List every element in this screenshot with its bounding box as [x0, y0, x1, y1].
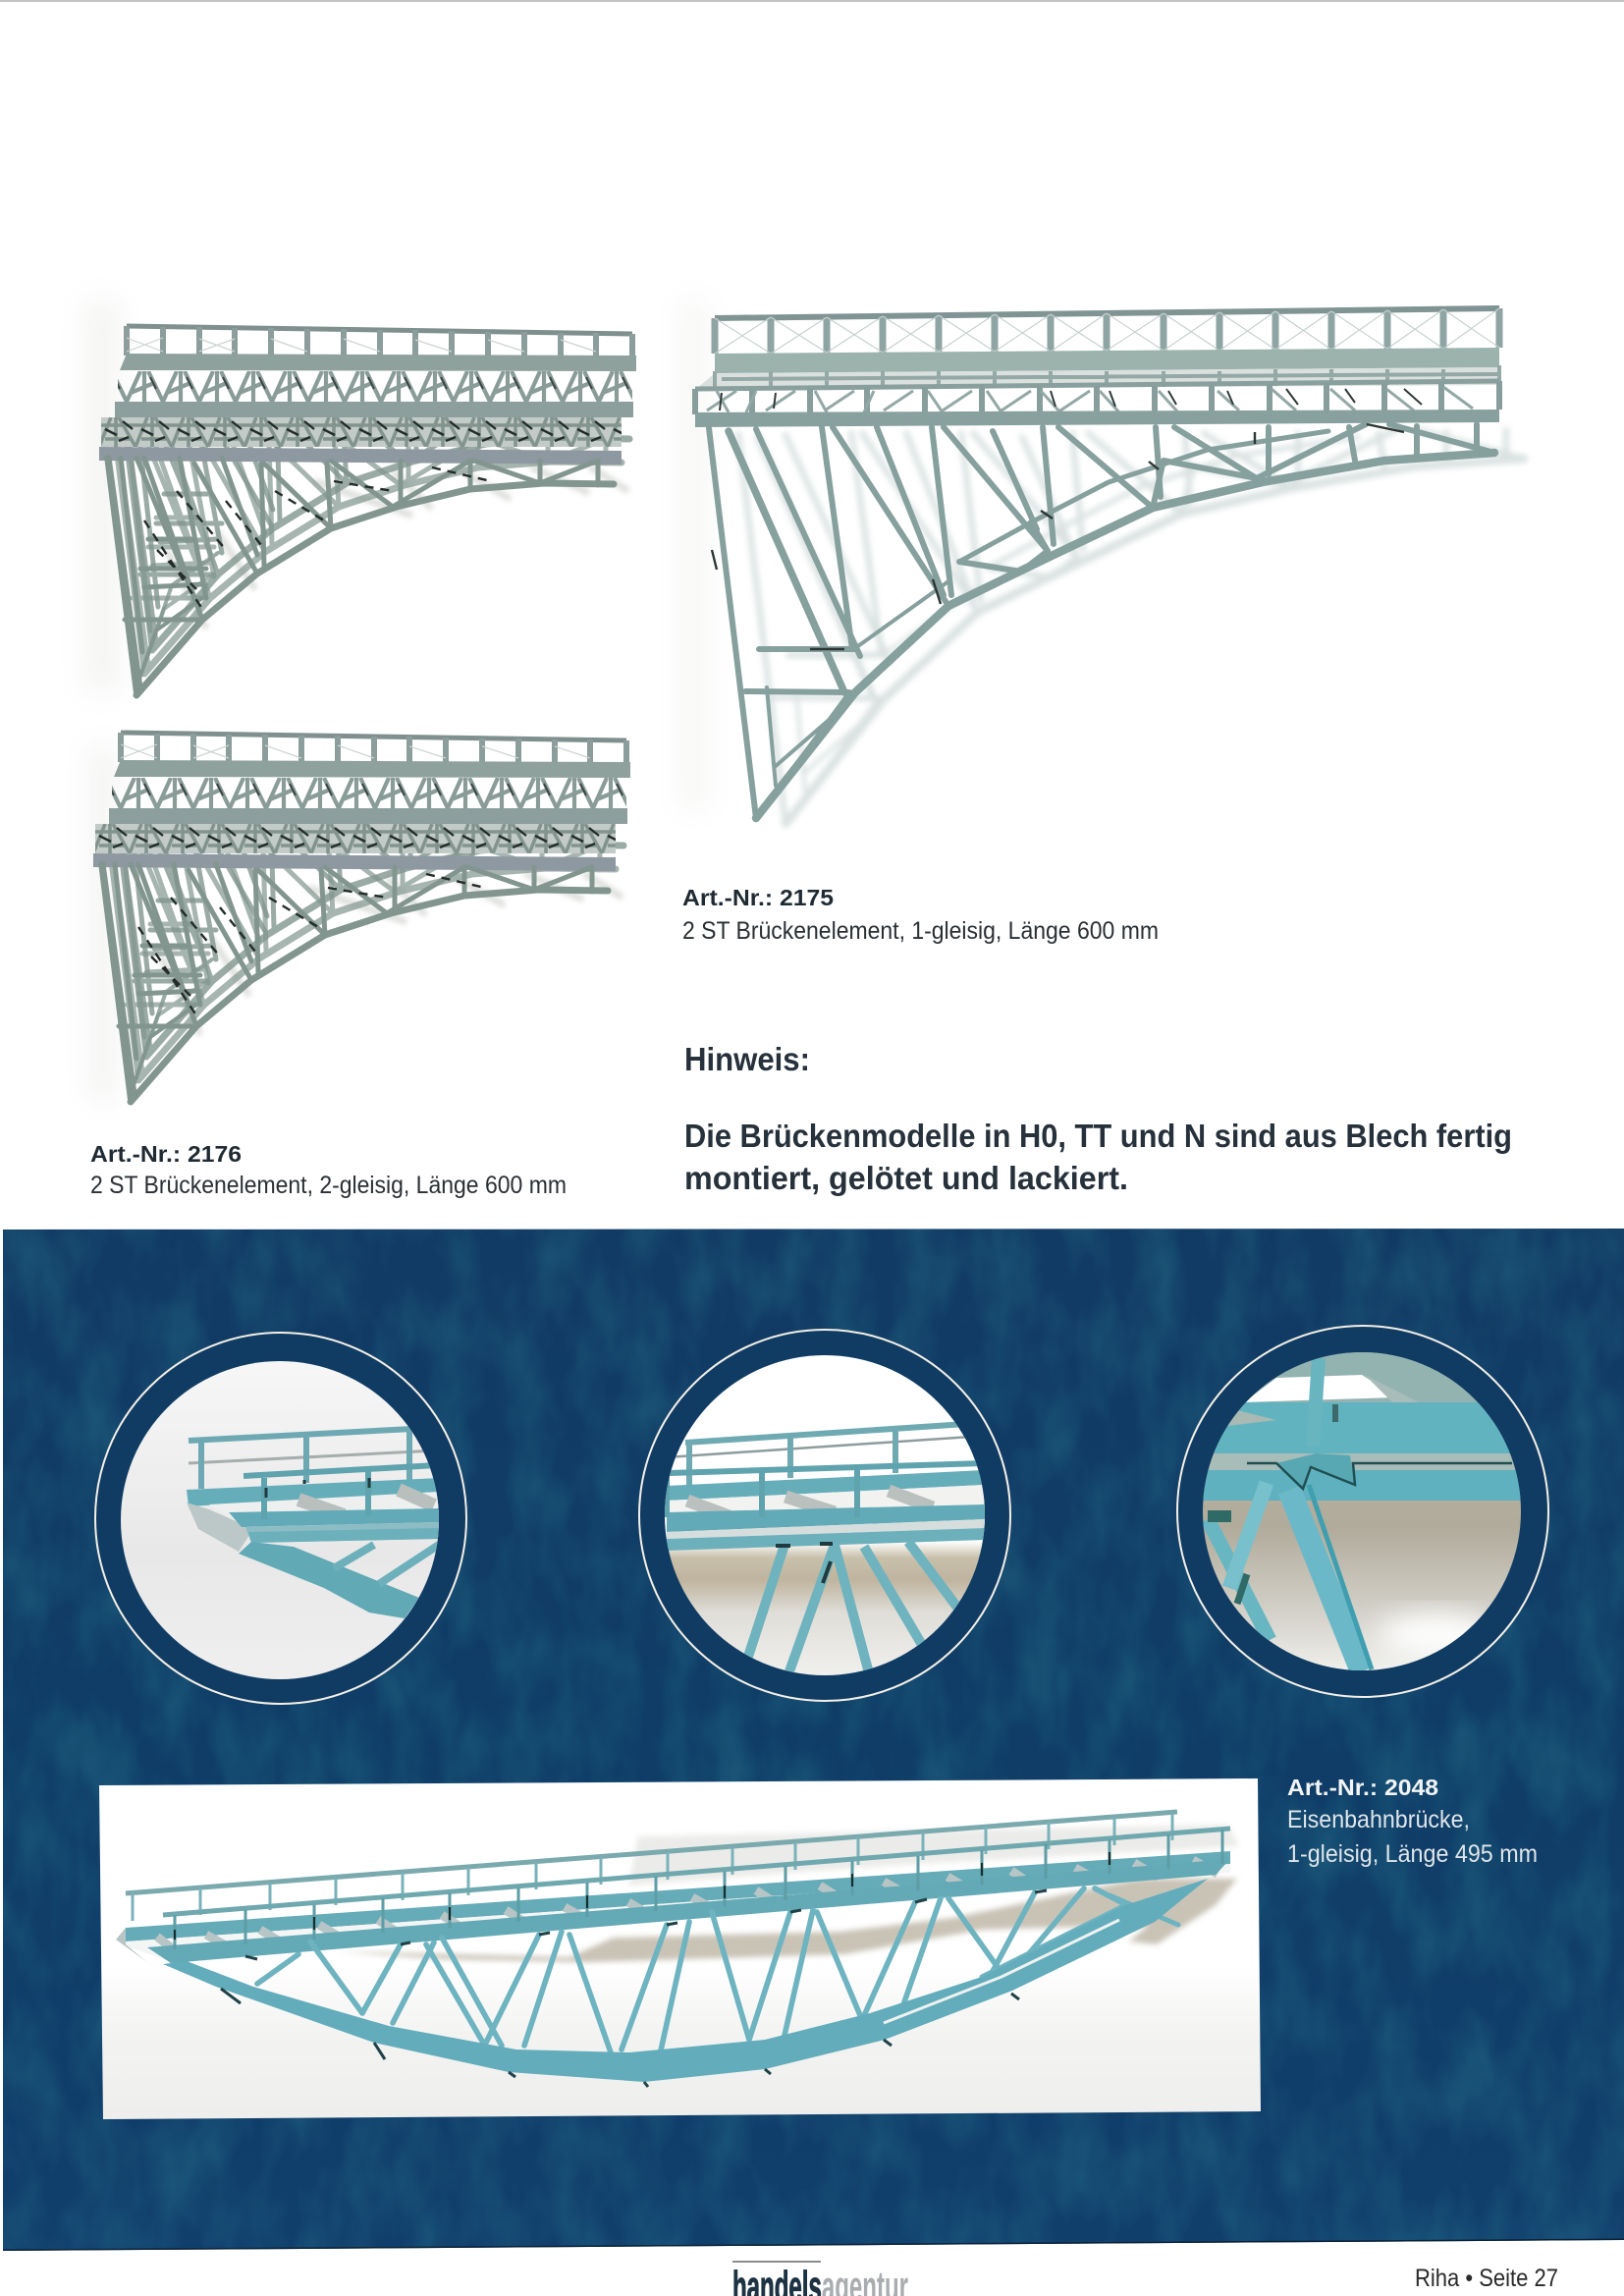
photo: bridge model 2175 [695, 308, 1524, 824]
photo backdrop: soft shading left of bridge models [84, 300, 707, 1100]
caption: Art.-Nr. 2175: 2 ST Brückenelement, 1-gleisig, Länge 600 mm [682, 917, 1159, 945]
caption: Art.-Nr. 2175: Art.-Nr.: 2175 [682, 885, 834, 910]
bridge 2048 truss diagonals [257, 1888, 1178, 2059]
caption: Art.-Nr. 2176 [90, 1141, 567, 1199]
bridge 2048 lower arch [163, 1879, 1208, 2082]
bridge 2176 cast shadow [167, 466, 628, 629]
caption: Art.-Nr. 2048 [1287, 1775, 1538, 1868]
bridge 2175 upper deck girder [715, 348, 1499, 373]
caption: Art.-Nr. 2175 [682, 885, 1159, 945]
caption: Art.-Nr. 2048: Eisenbahnbrücke, [1287, 1806, 1470, 1833]
note text [684, 1118, 1512, 1196]
bridge 2176 deck girders [99, 354, 636, 465]
photo: bridge model 2176 lower [93, 733, 630, 1102]
bridge 2175 dark joint flecks [712, 424, 1404, 649]
bridge 2175 floor beams between decks [695, 367, 1499, 390]
bridge 2048 joint details [221, 1890, 1047, 2087]
footer page number: Riha • Seite 27 [1415, 2265, 1558, 2292]
bridge 2176 front truss members [107, 458, 614, 695]
note text: Die Brückenmodelle in H0, TT und N sind aus Blech fertig [684, 1118, 1512, 1154]
detail circle 3: truss joint close-up [1177, 1326, 1548, 1697]
photo: bridge model 2176 upper [99, 326, 636, 695]
bridge 2176 top railing [127, 326, 632, 355]
bridge 2048 railings [126, 1812, 1230, 1949]
bridge 2176 middle truss [115, 436, 622, 674]
detail circle 1: bridge end [95, 1333, 466, 1704]
caption: Art.-Nr. 2176: Art.-Nr.: 2176 [90, 1141, 242, 1167]
note text: montiert, gelötet und lackiert. [684, 1160, 1128, 1196]
bridge 2048 deck [116, 1851, 1230, 1963]
caption: Art.-Nr. 2048: Art.-Nr.: 2048 [1287, 1775, 1438, 1800]
bridge 2176 lattice tiers [118, 371, 632, 402]
note heading: Hinweis: Hinweis: [684, 1041, 810, 1077]
bridge 2175 truss [709, 424, 1494, 818]
bridge 2175 front railing [695, 381, 1499, 414]
bridge 2175 cast shadow [738, 430, 1524, 824]
photo: bridge 2048 [99, 1778, 1261, 2119]
detail circle 2: bridge mid span [639, 1330, 1010, 1701]
bridge 2176 dark joint flecks [144, 467, 491, 609]
bridge 2175 upper railing [715, 308, 1499, 354]
bridge 2175 front deck girder [695, 410, 1499, 427]
panel: dark blue band [3, 1229, 1624, 2251]
bridge 2176 rear truss [123, 412, 629, 650]
caption: Art.-Nr. 2048: 1-gleisig, Länge 495 mm [1287, 1840, 1538, 1868]
caption: Art.-Nr. 2176: 2 ST Brückenelement, 2-gleisig, Länge 600 mm [90, 1172, 567, 1199]
bridge 2048 shadow [336, 1879, 1237, 1962]
